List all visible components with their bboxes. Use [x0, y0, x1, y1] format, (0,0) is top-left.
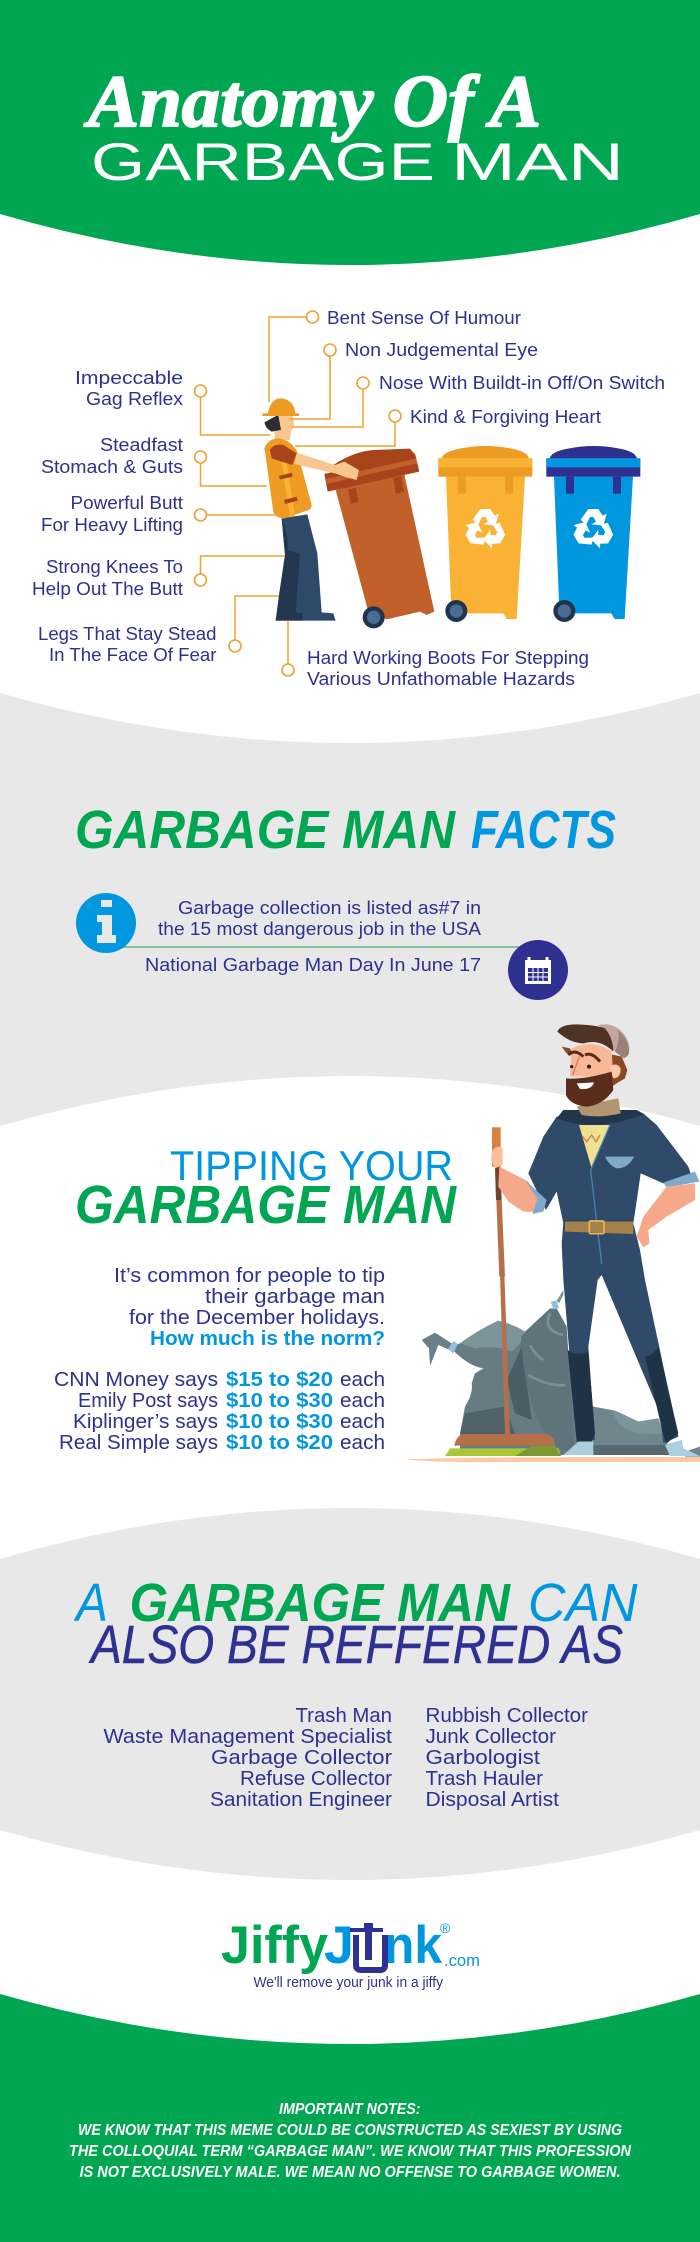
- icon: garbage man figure: [491, 1024, 700, 1456]
- callout: knees: Help Out The Butt: [32, 579, 183, 599]
- callout: legs: In The Face Of Fear: [49, 645, 216, 665]
- callout: butt: [41, 493, 275, 535]
- callout: boots: Hard Working Boots For Stepping: [307, 648, 589, 668]
- heading: garbage man facts: FACTS: [471, 800, 616, 860]
- icon: worker figure: [262, 398, 359, 621]
- callout: knees: [32, 556, 285, 599]
- heading: a garbage man can also be reffered as: A: [73, 1573, 108, 1633]
- title: [84, 61, 624, 192]
- logo: jiffy junk: We'll remove your junk in a jiffy: [254, 1974, 443, 1991]
- text block: tip amounts: Real Simple says: [59, 1432, 218, 1454]
- text block: tip amounts: Kiplinger’s says: [73, 1411, 218, 1433]
- callout: gag reflex: Impeccable: [75, 368, 183, 388]
- text block: alternate names right column: Rubbish Collector: [426, 1705, 588, 1727]
- text block: tipping intro: their garbage man: [205, 1286, 385, 1308]
- callout: nose: [292, 373, 665, 427]
- callout: legs: [38, 596, 279, 665]
- text block: tip amounts: each: [340, 1369, 385, 1391]
- text block: alternate names right column: Garbologist: [426, 1747, 540, 1769]
- text block: tip amounts: $10 to $30: [226, 1390, 333, 1412]
- icon: bearded head with cap: [557, 1024, 629, 1116]
- illustration: garbage man with broom and bags: [405, 1024, 700, 1462]
- logo: jiffy junk: [221, 1916, 480, 1991]
- heading: garbage man facts: GARBAGE MAN: [75, 800, 456, 860]
- icon: yellow recycling bin: [438, 446, 532, 622]
- text block: alternate names left column: Waste Management Specialist: [104, 1726, 392, 1748]
- callout: gag reflex: [75, 368, 270, 435]
- title: MAN: [451, 133, 624, 192]
- text block: tipping intro: [114, 1265, 385, 1350]
- icon: blue recycling bin: [546, 446, 640, 622]
- text block: alternate names left column: Refuse Collector: [240, 1768, 392, 1790]
- panel: green footer background: [0, 1994, 700, 2242]
- callout: bent sense of humour: Bent Sense Of Humour: [327, 308, 521, 328]
- text block: alternate names right column: [426, 1705, 588, 1811]
- callout: butt: Powerful Butt: [70, 493, 183, 513]
- text block: alternate names left column: [104, 1705, 392, 1811]
- callout: stomach: Steadfast: [100, 435, 183, 455]
- icon: brown bin: [324, 449, 434, 628]
- text block: important notes: WE KNOW THAT THIS MEME COULD BE CONSTRUCTED AS SEXIEST BY USING: [78, 2122, 622, 2139]
- callout: nose: Nose With Buildt-in Off/On Switch: [379, 373, 665, 393]
- fact: connecting line and facts text: [120, 898, 520, 975]
- callout: legs: Legs That Stay Stead: [38, 624, 216, 644]
- text block: tipping intro: How much is the norm?: [150, 1328, 385, 1350]
- text block: alternate names right column: Trash Hauler: [426, 1768, 543, 1790]
- heading: a garbage man can also be reffered as: GARBAGE MAN: [130, 1573, 511, 1633]
- callout: stomach: Stomach & Guts: [41, 457, 183, 477]
- callout: boots: Various Unfathomable Hazards: [307, 669, 575, 689]
- text block: tip amounts: CNN Money says: [54, 1369, 218, 1391]
- text block: alternate names left column: Garbage Collector: [211, 1747, 392, 1769]
- logo: jiffy junk: ®: [440, 1920, 451, 1936]
- heading: a garbage man can also be reffered as: [73, 1573, 638, 1675]
- fact: connecting line and facts text: National Garbage Man Day In June 17: [145, 955, 481, 975]
- fact: connecting line and facts text: the 15 most dangerous job in the USA: [158, 919, 481, 939]
- callout: stomach: [41, 435, 267, 486]
- callout: boots: [282, 621, 589, 689]
- icon: info circle: [76, 893, 136, 953]
- heading: a garbage man can also be reffered as: ALSO BE REFFERED AS: [88, 1615, 623, 1675]
- logo: jiffy junk: .com: [444, 1951, 480, 1970]
- text block: alternate names left column: Trash Man: [296, 1705, 392, 1727]
- panel: grey facts background: [0, 693, 700, 1126]
- logo: jiffy junk: Jiffy: [221, 1916, 329, 1975]
- text block: important notes: IS NOT EXCLUSIVELY MALE. WE MEAN NO OFFENSE TO GARBAGE WOMEN.: [80, 2164, 620, 2181]
- text block: alternate names right column: Junk Collector: [426, 1726, 556, 1748]
- text block: alternate names right column: Disposal Artist: [426, 1789, 559, 1811]
- callout: non judgemental eye: Non Judgemental Eye: [345, 340, 538, 360]
- text block: tip amounts: each: [340, 1390, 385, 1412]
- callout: knees: Strong Knees To: [46, 557, 183, 577]
- heading: tipping your garbage man: GARBAGE MAN: [75, 1175, 457, 1235]
- icon: garbage bags: [422, 1290, 700, 1457]
- text block: tip amounts: $15 to $20: [226, 1369, 333, 1391]
- panel: grey alternate names background: [0, 1508, 700, 1880]
- heading: tipping your garbage man: [75, 1142, 457, 1235]
- panel: green header background: [0, 0, 700, 265]
- text block: tip amounts: $10 to $30: [226, 1411, 333, 1433]
- text block: important notes: [69, 2101, 631, 2181]
- text block: tipping intro: It’s common for people to tip: [114, 1265, 385, 1287]
- text block: tip amounts: Emily Post says: [78, 1390, 218, 1412]
- ground shadow: [405, 1457, 700, 1462]
- logo: jiffy junk: J: [324, 1916, 354, 1975]
- text block: tipping intro: for the December holidays.: [129, 1307, 385, 1329]
- heading: tipping your garbage man: TIPPING YOUR: [170, 1142, 453, 1189]
- callout: heart: [295, 407, 601, 446]
- callout: bent sense of humour: [269, 308, 521, 402]
- logo: jiffy junk: nk: [384, 1916, 442, 1975]
- text block: tip amounts: [54, 1369, 385, 1454]
- icon: broom handle top: [492, 1127, 505, 1277]
- callout: non judgemental eye: [290, 340, 538, 419]
- illustration: worker pushing bins: [262, 398, 640, 628]
- callout: heart: Kind & Forgiving Heart: [410, 407, 601, 427]
- text block: alternate names left column: Sanitation Engineer: [210, 1789, 392, 1811]
- callout: gag reflex: Gag Reflex: [86, 389, 183, 409]
- callout: butt: For Heavy Lifting: [41, 515, 183, 535]
- title: Anatomy Of A: [84, 61, 541, 143]
- title: GARBAGE: [91, 133, 435, 192]
- icon: calendar circle: [508, 940, 568, 1000]
- heading: a garbage man can also be reffered as: CAN: [528, 1573, 638, 1633]
- text block: tip amounts: $10 to $20: [226, 1432, 333, 1454]
- text block: important notes: THE COLLOQUIAL TERM “GARBAGE MAN”. WE KNOW THAT THIS PROFESSION: [69, 2143, 631, 2160]
- fact: connecting line and facts text: Garbage collection is listed as#7 in: [178, 898, 481, 918]
- text block: important notes: IMPORTANT NOTES:: [279, 2101, 420, 2118]
- icon: broom: [445, 1273, 561, 1456]
- text block: tip amounts: each: [340, 1432, 385, 1454]
- text block: tip amounts: each: [340, 1411, 385, 1433]
